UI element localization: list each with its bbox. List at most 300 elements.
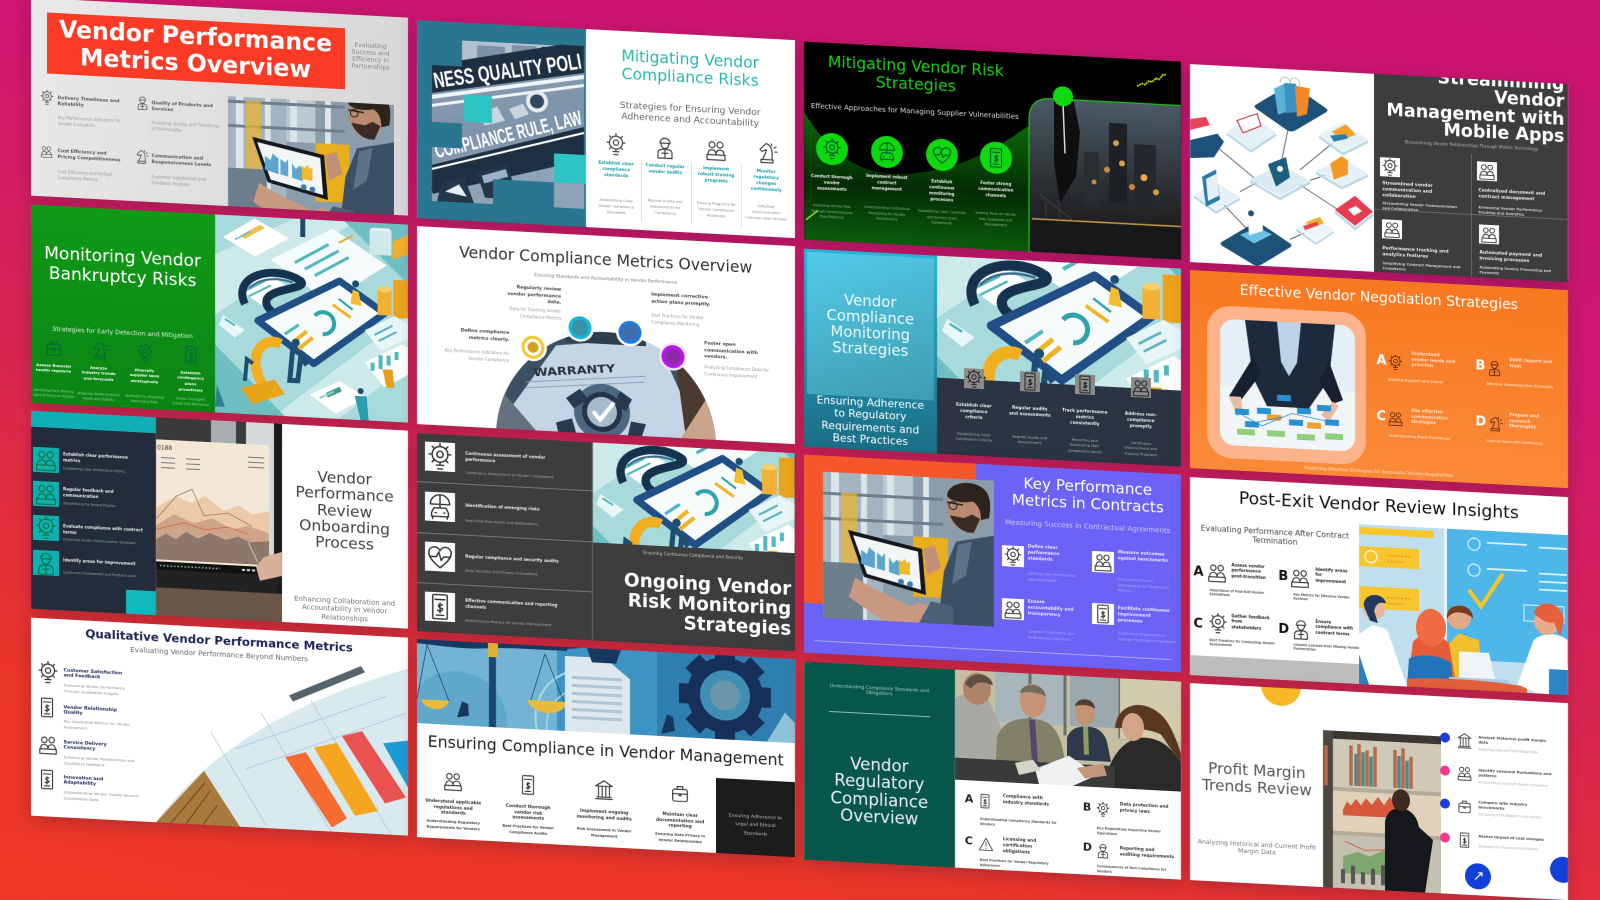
- item C: [1376, 406, 1468, 444]
- item: standards: Define clear: [1028, 545, 1058, 551]
- subtitle: Measuring Success in Contractual Agreements: [1005, 517, 1170, 535]
- item: innovation: Adaptability: [64, 781, 96, 787]
- item: corrective action: Best Practices for Vendor: [651, 313, 704, 321]
- item A: Compliance with: [1003, 794, 1043, 801]
- item: monitoring: Agreements: [931, 221, 952, 226]
- item: risk assessments: Best Practices for Vendor: [502, 824, 554, 830]
- yellow half circle: [1261, 665, 1301, 707]
- teal side panel with compliance mosaic: [416, 20, 586, 228]
- item: payment: [1478, 224, 1551, 276]
- item: evaluate: [32, 514, 143, 545]
- scales and gear illustration: [417, 639, 795, 743]
- navy lower panel: [937, 377, 1181, 466]
- panel: Key Performance Metrics in Contracts: [804, 455, 1181, 673]
- item: criteria: criteria: [965, 415, 983, 421]
- subtitle: Requirements and: [821, 418, 919, 437]
- navy side panel: [31, 411, 156, 615]
- isometric illustration: [937, 255, 1181, 390]
- item: criteria: Establishing Clear: [957, 432, 990, 437]
- item: service delivery: Enhancing Vendor Relationships and: [64, 754, 135, 763]
- item D: [1278, 616, 1360, 657]
- item: contract: Monitoring for Vendor: [868, 211, 905, 217]
- item: standards: [598, 132, 634, 215]
- item: audits: Assessments for: [650, 204, 680, 210]
- item D: Partnerships: [1293, 646, 1316, 651]
- isometric illustration: [592, 442, 795, 553]
- chart photo: [131, 643, 408, 835]
- title: Monitoring: [830, 322, 910, 344]
- item B: [1083, 800, 1179, 841]
- item: cost: Cost Efficiency and: [58, 149, 107, 157]
- photo: man with tablet: [823, 472, 994, 627]
- item: quality: Analyzing Quality and Timeliness: [152, 120, 219, 129]
- item: standards: compliance: [602, 167, 630, 173]
- subtitle: Accountability in Vendor: [302, 603, 387, 616]
- item: non-compliance: Training Programs: [1124, 452, 1157, 457]
- orange corner block: [804, 455, 976, 612]
- item: regulations: [420, 768, 486, 832]
- item: corrective action: Implement corrective: [651, 293, 708, 301]
- item: assessments: assessments: [817, 186, 847, 192]
- item: financial health: Signs of Financial Distress: [33, 393, 74, 399]
- item: regularly review: [507, 284, 562, 320]
- item: payment: Automated payment and: [1479, 250, 1542, 259]
- item: supplier base: [125, 343, 164, 404]
- footer note: Mastering Effective Strategies for Successful Vendor Negotiations: [1304, 465, 1454, 478]
- item: supplier base: supplier base: [130, 372, 159, 379]
- item: monitor: continuously: [751, 187, 782, 193]
- item: seasonal: [1440, 763, 1562, 792]
- item: audits: Regular Audits and: [1012, 434, 1047, 440]
- item: standards: [1002, 543, 1087, 588]
- item: track: Compliance Issues: [1068, 449, 1102, 454]
- item: feedback: Streamlining the Review Process: [63, 502, 115, 508]
- item: define metrics: Define compliance: [461, 329, 509, 336]
- item D: Reporting and: [1120, 846, 1154, 853]
- item: regularly review: Data for Tracking Vendor: [509, 306, 561, 314]
- item: assessments: [810, 132, 853, 220]
- item: cost: Cost Efficiency and Budget: [58, 169, 113, 177]
- item: quality: [138, 96, 220, 133]
- item: standards: Defining Key Performance: [1028, 572, 1076, 578]
- icon: partial button: [1550, 856, 1576, 884]
- title: [804, 289, 937, 361]
- item: audits: Conduct regular: [646, 163, 685, 170]
- item A: A: [1193, 564, 1203, 579]
- item: continuous assessment: Continuous assessment of vendor: [465, 450, 545, 460]
- panel: Vendor Compliance Metrics Overview: [417, 226, 795, 444]
- item: communication: Management: [985, 222, 1007, 228]
- item: risk assessments: Compliance Audits: [509, 830, 547, 836]
- item: improvement: Identify areas for improvement: [63, 558, 135, 566]
- item: track: [1058, 373, 1112, 460]
- item: contingency: proactively: [178, 386, 203, 392]
- item: standards: Indicators Refer: [1028, 577, 1057, 583]
- item: monitoring: [918, 138, 966, 226]
- item: improvement: processes: [1118, 618, 1143, 625]
- grey floor strip: [1190, 655, 1360, 684]
- title: Strategies: [876, 73, 956, 96]
- title: Mitigating Vendor Risk: [828, 52, 1004, 81]
- subtitle: Effective Approaches for Managing Supplier Vulnerabilities: [811, 101, 1019, 121]
- item: training: Vendor Compliance: [698, 207, 734, 213]
- item: communication: communication and: [1382, 187, 1432, 195]
- item: outcomes: Measure outcomes: [1118, 550, 1165, 558]
- title: Review: [317, 500, 372, 521]
- item: regularly review: vendor performance: [507, 292, 561, 300]
- item: monitoring: Establish: [931, 179, 952, 185]
- item: tracking: Compliance: [1382, 267, 1406, 272]
- item: improvement: improvement: [1118, 612, 1151, 619]
- item C: [1193, 611, 1275, 651]
- item A: Assess vendor: [1231, 562, 1265, 569]
- item: corrective action: [651, 292, 710, 327]
- item D: D: [1083, 840, 1092, 853]
- item: monitoring: monitoring: [929, 191, 955, 197]
- title: [1190, 759, 1323, 801]
- item D: [1083, 841, 1179, 879]
- subtitle: Obligations: [866, 691, 893, 697]
- item: foster communication: Foster open: [704, 342, 736, 348]
- item: supplier base: Strategies for Mitigating: [125, 393, 164, 399]
- item: relationship quality: [36, 695, 126, 732]
- item A: industry standards: [1003, 800, 1049, 807]
- subtitle: Success and: [352, 49, 390, 58]
- item: emerging risks: [425, 491, 585, 532]
- item: regulations: Understanding Regulatory: [426, 819, 480, 826]
- item: outcomes: Metrics: [1118, 588, 1131, 593]
- item: documentation: [647, 780, 713, 844]
- item: communication: and Collaboration: [1382, 207, 1418, 213]
- item: payment: Payments: [1479, 271, 1499, 276]
- item: ongoing monitoring: monitoring and audits: [577, 814, 632, 822]
- title: Post-Exit Vendor Review Insights: [1239, 488, 1519, 523]
- green swoosh and city photo: [804, 74, 1182, 260]
- subtitle: Strategies for Early Detection and Mitigation: [52, 326, 193, 340]
- item: evaluate: terms: [63, 529, 77, 535]
- item: outcomes: [1092, 549, 1177, 598]
- item: cost: [40, 146, 120, 183]
- panel: Streamlining Vendor Management with Mobile Apps: [1190, 64, 1568, 282]
- item: risk assessments: [495, 772, 561, 836]
- item: tracking: Simplifying Contract Management and: [1382, 261, 1460, 269]
- item C: Assessments: [1209, 642, 1232, 647]
- item: contract: management: [872, 186, 902, 192]
- item: relationship quality: Vendor Relationship: [64, 705, 117, 713]
- item: relationship quality: Key Qualitative Metrics for Vendor: [64, 718, 130, 726]
- item: contingency: Supply Risk Monitoring: [172, 401, 209, 407]
- item: communication: [1380, 157, 1457, 213]
- title: Metrics Overview: [80, 44, 311, 84]
- item: contingency: plans: [185, 381, 197, 386]
- item: contract: Implement robust: [866, 173, 907, 181]
- title: Management with: [1386, 100, 1564, 130]
- item D: [1475, 411, 1561, 449]
- item: standards: Vendor Compliance: [598, 204, 634, 210]
- item: reporting: Effective communication and reporting: [465, 597, 557, 607]
- subtitle: Ensuring Continuous Compliance and Security: [643, 551, 743, 561]
- item: contingency: [172, 346, 209, 407]
- item: foster communication: vendors.: [704, 355, 727, 361]
- panel: Profit Margin Trends Review: [1190, 683, 1568, 900]
- item: performance metrics: [32, 446, 128, 474]
- item: delivery: Reliability: [58, 102, 84, 109]
- item: criteria: Establish clear: [956, 402, 992, 409]
- item: seasonal: patterns: [1478, 772, 1497, 778]
- item: improvement: through Performance Feedback: [1118, 637, 1176, 644]
- title: [282, 467, 408, 555]
- item: evaluate: Evaluate compliance with contract: [63, 524, 143, 533]
- item: accountability: transparency: [1028, 612, 1061, 618]
- item: communication: communication: [978, 186, 1013, 193]
- item: non-compliance: [1114, 376, 1168, 463]
- title: [995, 474, 1181, 518]
- item: contingency: Establish: [181, 369, 201, 375]
- item: customer satisfaction: [36, 659, 126, 696]
- item A: priorities: [1411, 363, 1434, 369]
- item: customer satisfaction: and Feedback: [64, 674, 100, 680]
- item: financial health: health regularly: [36, 367, 71, 374]
- laptop photo: [156, 417, 282, 622]
- item: communication: Streamlined vendor: [1382, 181, 1433, 189]
- inner cyan box: [807, 252, 934, 400]
- title: Compliance Risks: [622, 65, 759, 90]
- item: standards: standards: [604, 173, 628, 179]
- item: training: programs: [705, 178, 728, 184]
- item: quality: of Deliverables: [152, 126, 182, 133]
- subtitle: Best Practices: [833, 431, 908, 448]
- item: regulations: Understand applicable: [425, 799, 481, 807]
- item: foster communication: Continuous Improvement: [704, 371, 757, 379]
- item: seasonal: Identify seasonal fluctuations and: [1478, 767, 1551, 776]
- callout: black box: Standards: [744, 831, 767, 837]
- item A: Building Rapport with Clients: [1388, 378, 1443, 385]
- item B: improvement: [1315, 578, 1346, 584]
- item: quality: Quality of Products and: [152, 101, 213, 110]
- item: standards: standards: [1028, 557, 1053, 563]
- icon: arrow button: [1465, 863, 1491, 890]
- item C: Use effective: [1411, 409, 1443, 416]
- item: improvement: [1092, 603, 1177, 648]
- item: assessments: Assessing Vendor Risk: [813, 203, 851, 209]
- item D: Consequences of Non-Compliance for: [1097, 864, 1166, 871]
- item: innovation: Innovation and: [64, 775, 103, 782]
- item: audits: and assessments: [1009, 411, 1051, 418]
- item: performance metrics: metrics: [63, 457, 80, 463]
- item: tracking: analytics features: [1382, 252, 1428, 260]
- item D: D: [1278, 621, 1289, 637]
- item: monitoring: Establishing Clear Contracts: [918, 209, 966, 216]
- item: reporting: channels: [465, 603, 486, 609]
- item B: Operations: [1097, 831, 1117, 836]
- item C: C: [1193, 616, 1203, 631]
- item: communication: Sharing Tools on Vendor: [975, 211, 1016, 217]
- item: audits: [646, 137, 685, 216]
- subtitle: Margin Data: [1238, 848, 1276, 857]
- title: [621, 47, 760, 90]
- title: Effective Vendor Negotiation Strategies: [1240, 283, 1518, 314]
- item D: contract terms: [1315, 630, 1350, 636]
- item: improvement: Continuous Improvement: [1118, 631, 1165, 638]
- item A: A: [1376, 353, 1386, 369]
- panel: Vendor Compliance Monitoring Strategies: [804, 248, 1181, 466]
- icon rings: [521, 316, 687, 371]
- subtitle: Termination: [1252, 536, 1297, 547]
- item A: post-transition: [1231, 573, 1266, 580]
- item: documentation: Maintain clear: [662, 812, 698, 819]
- item: communication: collaboration: [1382, 193, 1416, 200]
- title: Compliance: [826, 306, 914, 328]
- item D: Ensure: [1315, 618, 1331, 624]
- item: trends: Analyze: [90, 365, 107, 370]
- subtitle: [282, 594, 408, 626]
- item: training: robust training: [698, 172, 734, 179]
- item: customer satisfaction: Customer Satisfaction: [64, 668, 122, 676]
- item: contingency: Vendor Contingent: [176, 396, 206, 402]
- item: ongoing monitoring: [571, 776, 637, 840]
- title: Mobile Apps: [1443, 121, 1564, 147]
- item: cost: Pricing Competitiveness: [58, 155, 120, 164]
- item: define metrics: metrics clearly.: [469, 336, 509, 343]
- subtitle: Ensuring Standards and Accountability in Vendor Performance: [534, 274, 677, 286]
- item D: Vendors: [1097, 869, 1112, 874]
- item C: Adherence: [980, 863, 1000, 868]
- panel: Ongoing Vendor Risk Monitoring Strategies: [417, 433, 795, 651]
- item B: [1475, 355, 1561, 393]
- subtitle: Analyzing Historical and Current Profit: [1198, 839, 1316, 852]
- item A: [1376, 350, 1468, 388]
- item: document: Enhancing Vendor Performance: [1478, 205, 1542, 213]
- item: foster communication: [704, 340, 769, 379]
- item: risk assessments: assessments: [512, 815, 544, 822]
- warranty image: [496, 332, 716, 440]
- subtitle: [804, 682, 955, 701]
- warranty image: WARRANTY: [533, 362, 617, 380]
- title: Bankruptcy Risks: [49, 263, 196, 291]
- item: regularly review: Regularly review: [517, 286, 561, 293]
- subtitle: Evaluating Performance After Contract: [1201, 523, 1349, 540]
- item: performance metrics: Establishing Clear Performance Metrics: [63, 467, 126, 474]
- item: improvement: [33, 550, 123, 581]
- item: monitor: [745, 142, 787, 222]
- item: tracking: Performance tracking and: [1382, 246, 1449, 255]
- item: customer satisfaction: Through Qualitative Insights: [64, 689, 119, 696]
- item: improvement: Continuous Improvement and Feedback Loop: [63, 571, 135, 578]
- title: Compliance: [830, 788, 928, 812]
- item: historical: data: [1478, 739, 1488, 745]
- item: relationship quality: Quality: [64, 711, 83, 717]
- title: Risk Monitoring: [628, 590, 791, 620]
- item: regulations: Requirements for Vendors: [427, 824, 480, 831]
- item: outcomes: Quantitative vs. Qualitative: [1118, 583, 1169, 590]
- panel: Qualitative Vendor Performance Metrics: [31, 617, 408, 835]
- item: historical: Analyze historical profit margin: [1478, 734, 1546, 743]
- callout: black box: [716, 778, 795, 857]
- teal corner square: [126, 590, 156, 615]
- item C: stakeholders: [1231, 624, 1261, 631]
- title: Vendor: [844, 291, 896, 311]
- item: benchmarks: benchmarks: [1478, 804, 1505, 811]
- item: standards: Standards: [607, 210, 626, 215]
- panel: Ensuring Compliance in Vendor Management: [417, 639, 795, 857]
- title: [1386, 68, 1564, 147]
- subtitle: Ensuring Adherence: [817, 393, 924, 412]
- item: continuous assessment: performance: [465, 456, 495, 463]
- item: feedback: [32, 480, 116, 508]
- item: financial health: Identifying Early Warning: [34, 388, 74, 394]
- item: contract: [864, 136, 910, 222]
- item: service delivery: [36, 732, 126, 769]
- title: Mitigating Vendor: [621, 47, 759, 72]
- item: criteria: compliance: [960, 409, 988, 415]
- item: service delivery: Service Delivery: [64, 740, 107, 747]
- item: contract: Performance: [876, 217, 898, 222]
- item: audits: Regular compliance and security audits: [465, 553, 559, 563]
- icon: arrow button: ↗: [1473, 868, 1484, 885]
- item B: Reviews: [1293, 596, 1308, 601]
- title: Profit Margin: [1208, 759, 1306, 782]
- item: monitor: regulatory: [753, 175, 779, 181]
- item: cost changes: Assess impact of cost changes: [1478, 833, 1544, 842]
- item B: for: [1315, 572, 1322, 577]
- subtitle: Efficiency in: [352, 56, 389, 65]
- item: communication: Customer Satisfaction and: [152, 174, 206, 182]
- item: define metrics: [444, 328, 510, 363]
- subtitle: Understanding Compliance Standards and: [830, 684, 929, 694]
- title: Onboarding: [299, 516, 390, 538]
- dark right panel: [1374, 74, 1568, 282]
- item: non-compliance: Improvement and: [1124, 446, 1157, 452]
- item: trends: and forecasts: [84, 375, 114, 382]
- item: regularly review: Compliance Metrics: [520, 313, 561, 320]
- title: [804, 752, 955, 831]
- item B: B: [1278, 568, 1288, 584]
- photo: analyst and charts: [1323, 730, 1441, 893]
- callout: black box: Legal and Ethical: [735, 822, 776, 829]
- item A: [1193, 560, 1275, 600]
- item: ongoing monitoring: Risk Assessment in Vendor: [577, 827, 632, 834]
- item: risk assessments: Conduct thorough: [506, 804, 551, 811]
- item: audits: Regular Audits and: [648, 198, 683, 204]
- title: Qualitative Vendor Performance Metrics: [85, 626, 353, 654]
- item: audits: Assessments: [1018, 440, 1042, 446]
- item: non-compliance: compliance: [1127, 418, 1154, 424]
- title: [828, 52, 1004, 96]
- item: monitor: Monitor: [757, 169, 776, 175]
- item: communication: channels: [986, 193, 1006, 199]
- item: regulations: standards: [441, 811, 466, 817]
- item: standards: performance: [1028, 551, 1059, 557]
- subtitle: [804, 393, 937, 450]
- subtitle: [620, 100, 761, 130]
- item: assessments: Through Comprehensive: [811, 209, 853, 215]
- green side panel: [804, 661, 955, 867]
- title: Vendor: [317, 468, 372, 489]
- item: track: metrics: [1076, 415, 1094, 421]
- title: Monitoring Vendor: [44, 243, 201, 271]
- item: training: Training Programs for: [696, 201, 736, 207]
- title: Vendor Performance: [59, 16, 332, 58]
- item A: vendor needs and: [1411, 358, 1455, 365]
- item: contingency: contingency: [177, 375, 204, 381]
- item A: Vendors: [980, 822, 995, 826]
- item: documentation: Ensuring Data Privacy in: [655, 832, 705, 838]
- item: training: [696, 140, 736, 218]
- title: Key Performance: [1023, 474, 1152, 499]
- item: accountability: Ensure: [1028, 600, 1045, 606]
- item B: trust: [1509, 364, 1521, 370]
- item: track: consistently: [1070, 421, 1100, 427]
